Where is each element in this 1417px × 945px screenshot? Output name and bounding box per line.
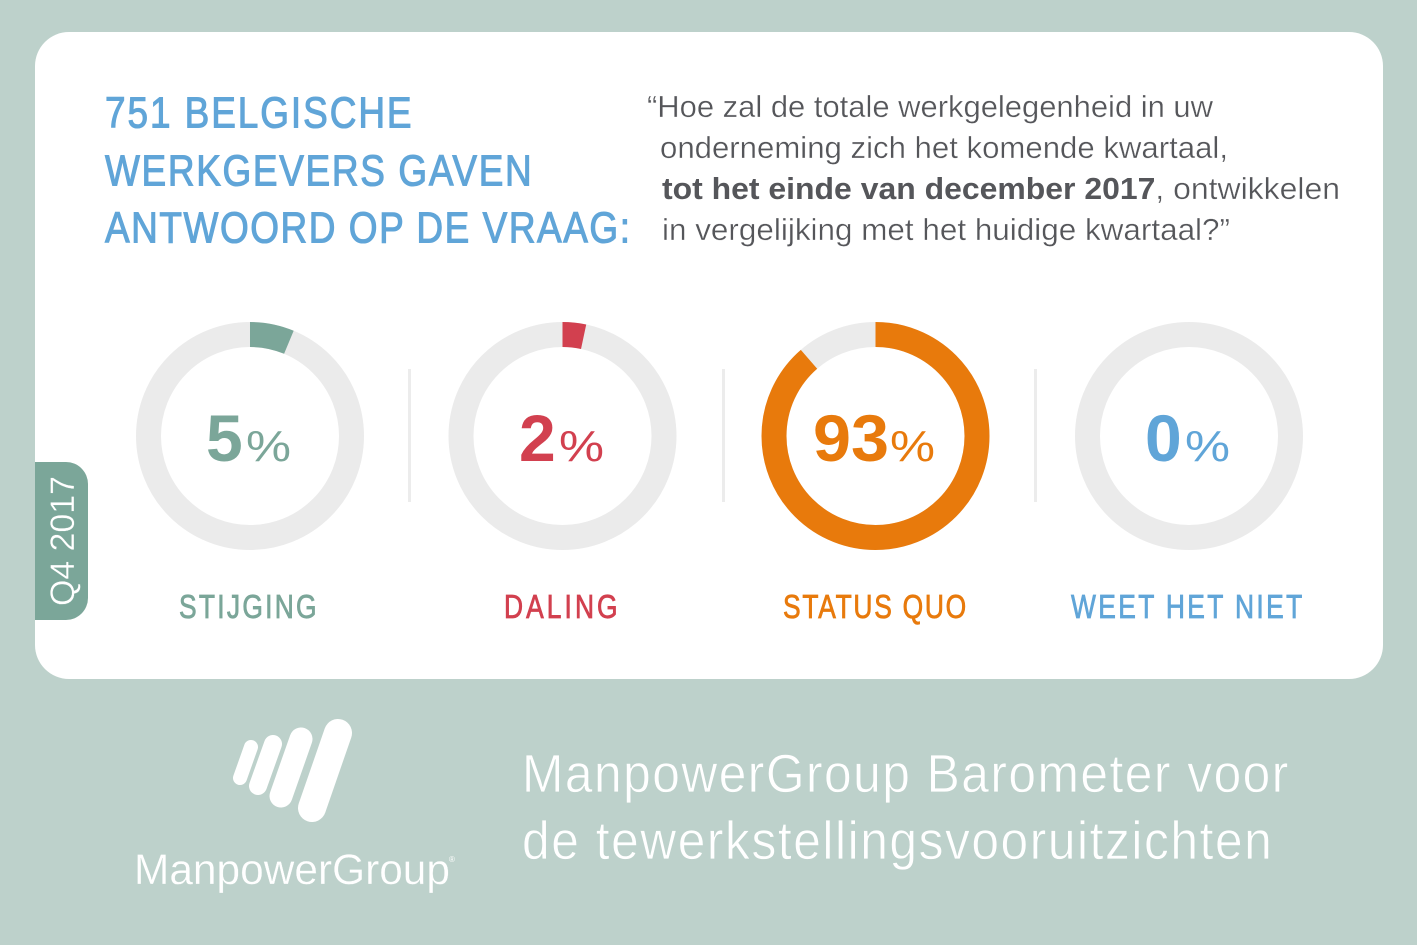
donut: status quo 93% xyxy=(774,334,977,626)
label: weet het niet: WEET HET NIET xyxy=(1071,589,1302,626)
question text: in vergelijking met het huidige kwartaal?” xyxy=(662,212,1230,247)
donut: stijging 5%: 5 xyxy=(206,401,243,475)
donut: weet het niet 0%: % xyxy=(1185,422,1230,471)
heading: ANTWOORD OP DE VRAAG: xyxy=(105,202,630,252)
question text: onderneming zich het komende kwartaal, xyxy=(660,130,1228,165)
label: stijging: STIJGING xyxy=(179,589,317,626)
donut: status quo 93%: 93 xyxy=(813,401,889,475)
tab: quarter label: Q4 2017 xyxy=(44,476,82,606)
dividers xyxy=(408,369,1037,502)
logo: wordmark: ManpowerGroup xyxy=(134,846,450,894)
heading: 751 BELGISCHE xyxy=(105,87,412,137)
donut: status quo 93%: % xyxy=(890,422,935,471)
tab: quarter label xyxy=(35,462,88,620)
logo: wordmark: ® xyxy=(449,855,455,864)
question text: tot het einde van december 2017 , ontwikkelen xyxy=(662,171,1340,206)
heading xyxy=(105,87,630,252)
donut: weet het niet 0% xyxy=(1071,334,1302,626)
donut: daling 2%: % xyxy=(559,422,604,471)
footer title: de tewerkstellingsvooruitzichten xyxy=(522,810,1272,870)
label: daling: DALING xyxy=(504,589,618,626)
donut: stijging 5%: % xyxy=(246,422,291,471)
heading: WERKGEVERS GAVEN xyxy=(105,145,532,195)
donut: weet het niet 0%: 0 xyxy=(1145,401,1182,475)
donut: stijging 5% xyxy=(148,334,352,626)
donut: daling 2% xyxy=(461,334,664,626)
footer title xyxy=(522,743,1288,870)
question text: “Hoe zal de totale werkgelegenheid in uw xyxy=(647,89,1214,124)
donut: daling 2%: 2 xyxy=(519,401,556,475)
logo: ManpowerGroup mark xyxy=(240,733,338,808)
question text xyxy=(647,89,1340,247)
footer title: ManpowerGroup Barometer voor xyxy=(522,743,1288,803)
panel: main white card xyxy=(35,32,1383,679)
label: status quo: STATUS QUO xyxy=(783,589,966,626)
